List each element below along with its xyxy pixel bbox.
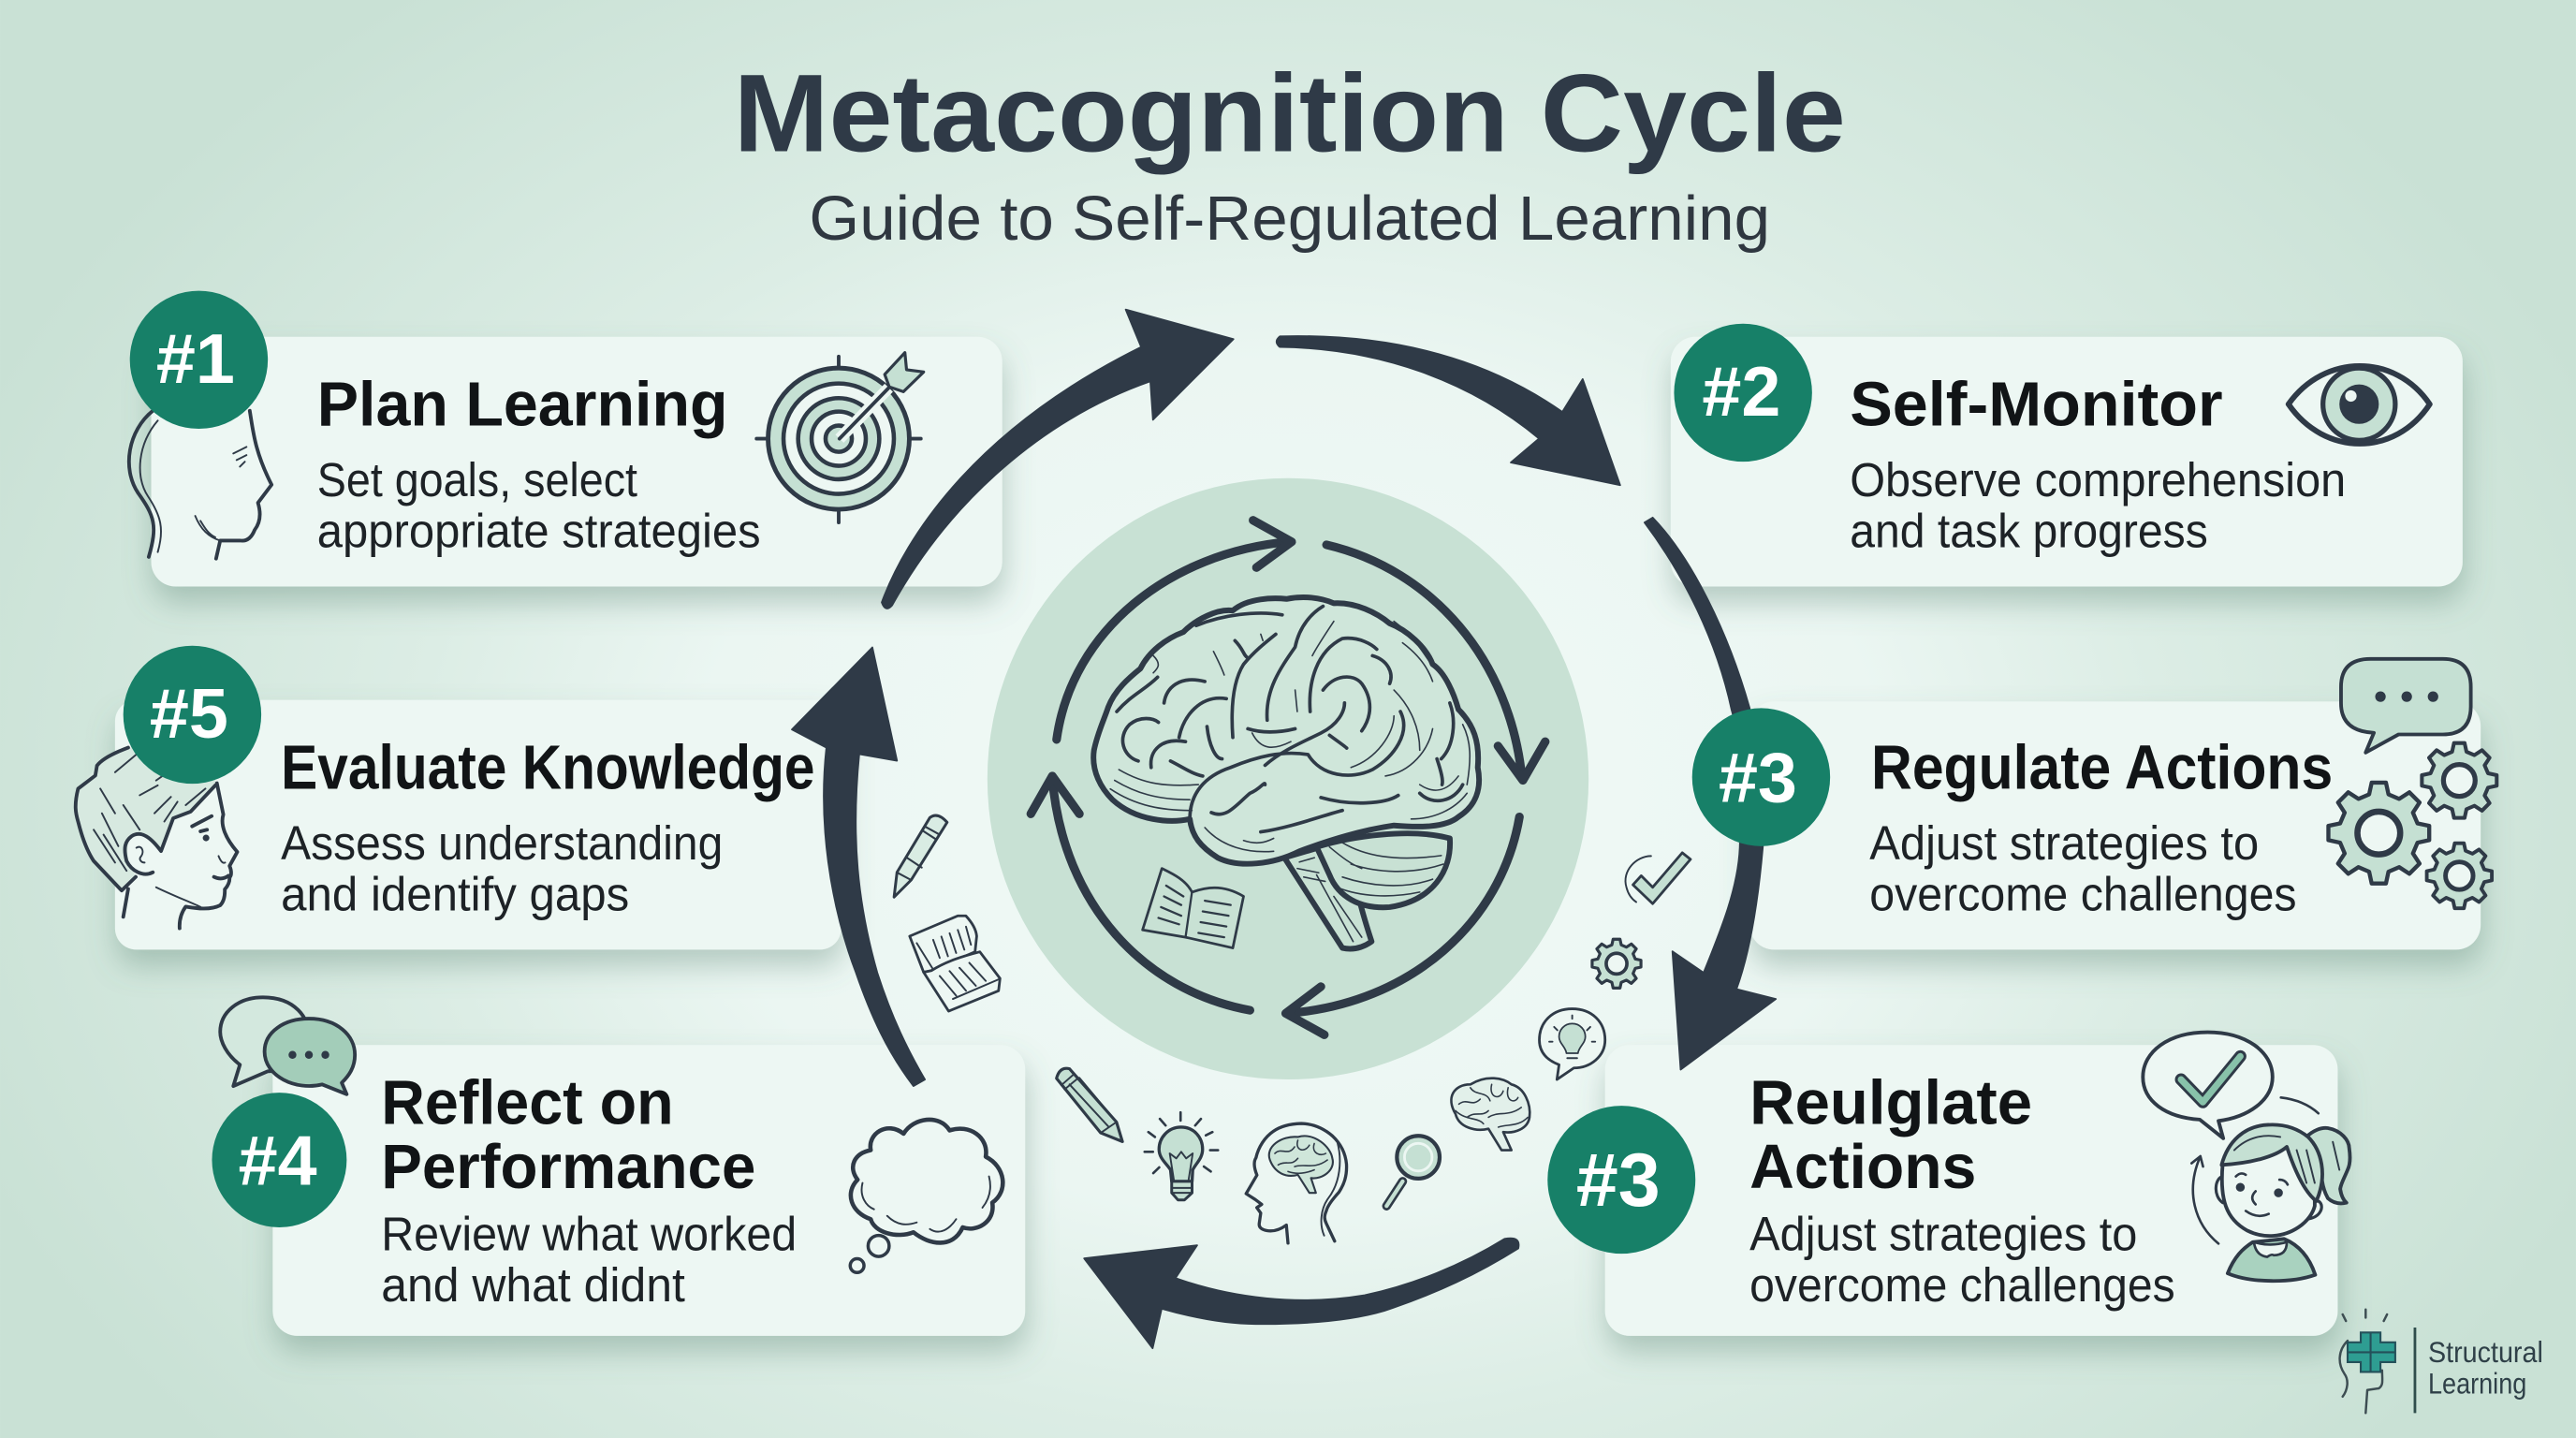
subtitle: Guide to Self-Regulated Learning	[809, 184, 1770, 254]
badge #3 lower	[1547, 1106, 1695, 1254]
body text	[317, 453, 761, 557]
badge #2: #2	[1702, 352, 1780, 431]
body text	[381, 1208, 797, 1312]
book inside circle	[1143, 869, 1244, 948]
panel: reflect on performance	[212, 997, 1003, 1312]
big cycle arrow 1 to 2	[882, 310, 1234, 609]
floating icons	[894, 815, 1690, 1243]
child's body	[2228, 1239, 2315, 1281]
badge #5: #5	[150, 674, 228, 753]
logo: structural learning	[2340, 1310, 2543, 1413]
body text	[1749, 1208, 2175, 1312]
panel: reulglate actions	[1547, 1033, 2349, 1312]
icon: thought cloud	[850, 1120, 1003, 1272]
icon: gears	[2328, 743, 2496, 908]
icon: lightbulb	[1145, 1112, 1218, 1200]
icon: target with arrow	[756, 353, 924, 522]
badge #3	[1692, 708, 1830, 846]
logo mark	[2340, 1310, 2395, 1413]
icon: pencil lower	[1057, 1068, 1122, 1141]
body text	[281, 816, 723, 920]
heading: Actions	[1749, 1133, 1976, 1202]
body text: and task progress	[1850, 504, 2208, 557]
big cycle arrow to reflect	[1084, 1239, 1519, 1348]
hair	[2221, 1124, 2322, 1201]
badge #5	[124, 646, 261, 784]
badge #2	[1674, 324, 1812, 462]
icon: magnifier	[1386, 1136, 1440, 1206]
icon: chat bubbles	[220, 997, 355, 1094]
icon: open book	[910, 916, 1000, 1011]
body text	[1850, 453, 2346, 557]
logo wordmark: Learning	[2428, 1366, 2526, 1400]
face	[2222, 1134, 2315, 1236]
big cycle arrow to evaluate	[792, 647, 925, 1086]
heading: Reflect on	[381, 1068, 674, 1137]
panel: plan learning	[129, 291, 924, 559]
heading: Reulglate	[1749, 1068, 2032, 1137]
icon: speech bubble with check	[2143, 1033, 2319, 1138]
icon: small brain	[1451, 1078, 1530, 1151]
ponytail	[2305, 1128, 2349, 1203]
body text: and what didnt	[381, 1258, 685, 1312]
heading: Evaluate Knowledge	[281, 733, 815, 802]
icon: head with brain	[1246, 1123, 1347, 1243]
logo wordmark: Structural	[2428, 1335, 2543, 1369]
panel: self-monitor	[1674, 324, 2430, 557]
badge #1: #1	[156, 319, 235, 398]
inner cycle arrows and brain illustration	[1031, 521, 1545, 1034]
body text: Adjust strategies to	[1749, 1208, 2137, 1261]
title: Metacognition Cycle	[734, 51, 1846, 174]
icon: speech bubble	[2341, 659, 2471, 753]
body text: overcome challenges	[1869, 867, 2297, 920]
brain	[1093, 597, 1479, 949]
inner arrow bottom right	[1286, 817, 1519, 1034]
heading: Self-Monitor	[1850, 371, 2223, 440]
icon: boy head	[76, 748, 237, 929]
icon: smiling child	[2191, 1124, 2349, 1281]
panel: regulate actions	[1692, 659, 2496, 920]
body text: Adjust strategies to	[1869, 816, 2259, 870]
badge #4: #4	[239, 1121, 317, 1199]
icon: head profile	[129, 411, 271, 559]
big cycle arrow to self-monitor	[1277, 336, 1620, 485]
badge #3 lower: #3	[1576, 1138, 1661, 1223]
logo divider	[2414, 1328, 2416, 1413]
heading: Performance	[381, 1133, 755, 1202]
body text: Review what worked	[381, 1208, 797, 1261]
icon: small gear	[1592, 939, 1641, 988]
body text: and identify gaps	[281, 867, 629, 920]
icon: pencil upper	[894, 815, 947, 897]
inner arrow top right	[1326, 545, 1545, 781]
body text: appropriate strategies	[317, 504, 761, 557]
badge #4	[212, 1093, 346, 1227]
body text: Assess understanding	[281, 816, 723, 870]
badge #3: #3	[1719, 738, 1797, 816]
centre circle with brain	[988, 478, 1588, 1079]
logo wordmark	[2428, 1335, 2543, 1400]
heading	[381, 1068, 755, 1202]
big cycle arrow to regulate	[1645, 518, 1776, 1070]
heading	[1749, 1068, 2032, 1202]
body text: Set goals, select	[317, 453, 637, 506]
icon: check mark	[1626, 853, 1690, 903]
body text: Observe comprehension	[1850, 453, 2346, 506]
card backgrounds	[115, 337, 2481, 1336]
heading: Regulate Actions	[1871, 733, 2333, 802]
inner arrow top left	[1057, 521, 1292, 740]
ears	[2216, 1177, 2321, 1219]
icon: eye	[2289, 366, 2430, 444]
body text: overcome challenges	[1749, 1258, 2175, 1312]
heading: Plan Learning	[317, 371, 728, 440]
panel: evaluate knowledge	[76, 646, 815, 929]
badge #1	[130, 291, 268, 429]
icon: lightbulb bubble	[1540, 1009, 1605, 1079]
inner arrow bottom left	[1031, 776, 1250, 1010]
body text	[1869, 816, 2297, 920]
